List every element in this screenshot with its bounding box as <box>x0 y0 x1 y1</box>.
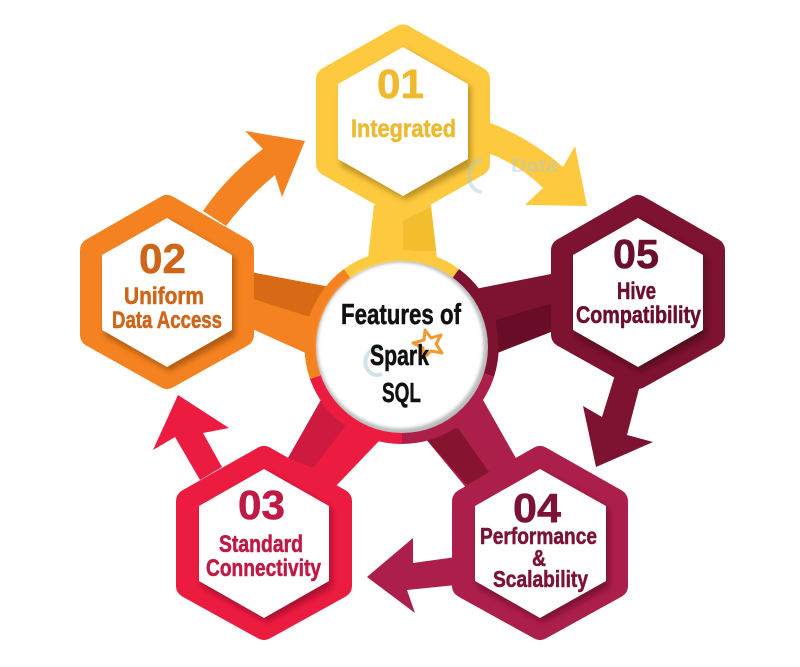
arrow: orange, 02 to 01 <box>203 131 305 226</box>
arrow: yellow, 01 to 05 <box>488 122 587 206</box>
label Performance & Scalability: & <box>532 545 546 571</box>
number 04: 04 <box>513 485 561 531</box>
number 05: 05 <box>613 231 659 277</box>
label Standard Connectivity <box>206 531 322 582</box>
connector: red <box>288 398 380 487</box>
label Integrated: Integrated <box>351 115 456 143</box>
arrow: rose, 04 to 03 <box>367 538 456 613</box>
connector: maroon <box>475 273 556 354</box>
watermark: Data logo <box>469 156 558 192</box>
watermark: center logo <box>365 349 382 375</box>
center hub circle <box>316 261 488 433</box>
center title: SQL <box>382 377 421 408</box>
hexagon 01: Integrated <box>328 36 478 206</box>
number 01: 01 <box>377 61 424 107</box>
center title <box>341 299 461 408</box>
icon: Spark star <box>413 330 442 358</box>
label Performance & Scalability <box>480 523 597 592</box>
hexagon 02: Uniform Data Access <box>92 207 242 377</box>
number 02: 02 <box>139 235 186 282</box>
label Standard Connectivity: Connectivity <box>206 555 322 582</box>
label Performance & Scalability: Performance <box>480 523 597 549</box>
arrow: maroon, 05 to 04 <box>583 375 653 467</box>
connector: rose <box>425 400 517 490</box>
label Standard Connectivity: Standard <box>219 531 303 558</box>
hexagon 04: Performance & Scalability <box>464 458 616 628</box>
label Uniform Data Access: Uniform <box>124 283 204 310</box>
connector: orange <box>250 272 335 355</box>
watermark: Data logo: Data <box>511 156 558 177</box>
hexagon 03: Standard Connectivity <box>188 458 340 628</box>
label Performance & Scalability: Scalability <box>493 566 588 592</box>
label Hive Compatibility <box>576 278 702 329</box>
label Uniform Data Access <box>112 283 222 334</box>
hexagon 05: Hive Compatibility <box>563 207 713 377</box>
label Hive Compatibility: Compatibility <box>576 302 702 329</box>
arrow: red, 03 to 02 <box>153 395 229 480</box>
center hub ring <box>305 250 499 444</box>
center title: Features of <box>341 299 461 331</box>
label Uniform Data Access: Data Access <box>112 307 222 334</box>
number 03: 03 <box>238 482 285 528</box>
center title: Spark <box>370 340 430 372</box>
label Hive Compatibility: Hive <box>617 278 656 305</box>
connector: yellow <box>368 205 437 258</box>
